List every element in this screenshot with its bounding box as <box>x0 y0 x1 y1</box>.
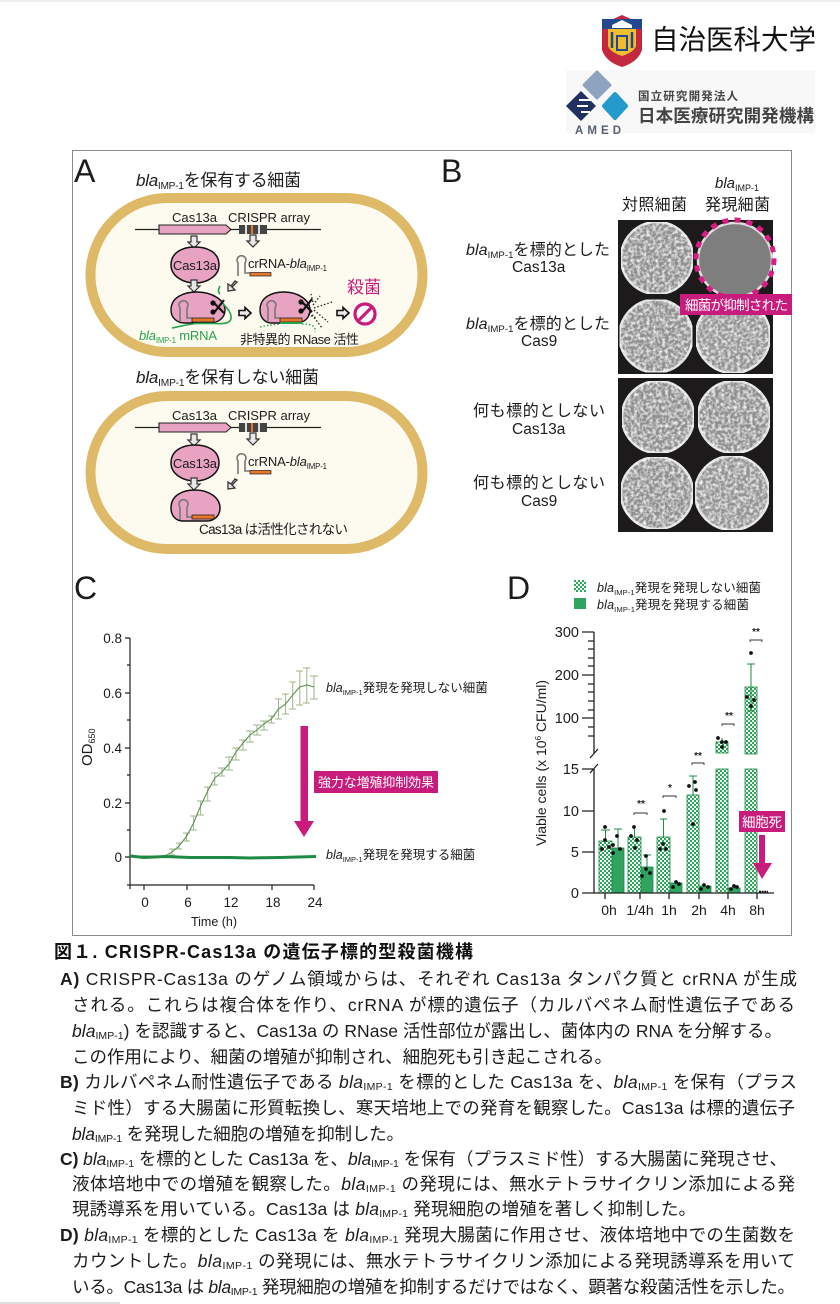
text block: C: bla <box>348 1149 371 1169</box>
legend: 発現を発現しない細菌 <box>635 581 761 595</box>
row label: Cas13a targeted: IMP-1 <box>488 250 513 261</box>
highlight ring <box>696 220 774 298</box>
heading: bacteria carrying blaIMP-1: IMP-1 <box>158 181 184 192</box>
axis title: Viable cells (x 10 <box>533 740 549 846</box>
panel letter A: A <box>74 153 96 189</box>
protein: Cas13a <box>171 445 219 481</box>
crRNA <box>237 454 327 474</box>
text block: B: B) カルバペネム耐性遺伝子である bla <box>60 1072 363 1092</box>
panel: C <box>74 570 488 929</box>
panel letter D: D <box>507 570 530 606</box>
heading: bacteria without blaIMP-1: を保有しない細菌 <box>184 368 319 387</box>
text block: B: を標的とした Cas13a を、 <box>393 1072 613 1092</box>
data points <box>600 651 768 892</box>
inactive complex <box>171 490 220 521</box>
arrow: crRNA transcription <box>247 235 259 247</box>
gene: CRISPR array <box>228 210 310 234</box>
protein: Cas13a <box>171 247 219 283</box>
series label: not expressing: bla <box>326 681 343 695</box>
plate photos: bottom <box>618 378 773 532</box>
significance marks: ** <box>752 627 760 638</box>
arrow: crRNA transcription <box>247 433 259 445</box>
significance marks: ** <box>694 751 702 762</box>
text block: B: bla <box>614 1072 638 1092</box>
caption title: 図１. CRISPR-Cas13a の遺伝子標的型殺菌機構 <box>54 942 473 962</box>
text block: C <box>60 1149 795 1220</box>
x tick labels: 0 <box>141 895 149 910</box>
significance marks <box>637 627 760 810</box>
text block: B: bla <box>72 1124 95 1144</box>
crRNA <box>237 256 327 276</box>
row label: no-target Cas9: 何も標的としない <box>473 474 605 492</box>
x tick labels: 12 <box>223 895 239 910</box>
gene: Cas13a <box>159 408 231 432</box>
arrow: complex formation <box>188 478 200 490</box>
label: not activated: Cas13a は活性化されない <box>199 522 348 537</box>
bar chart <box>533 625 774 918</box>
arrow: to killing <box>337 308 349 318</box>
x tick labels <box>601 902 765 918</box>
legend: bla <box>597 598 614 612</box>
y tick labels: 0 <box>571 886 579 902</box>
x tick labels <box>141 895 323 910</box>
text block: C: の発現には、無水テトラサイクリン添加による発 <box>396 1174 795 1194</box>
axis title: OD650: 650 <box>87 728 97 744</box>
text block: B: IMP-1 <box>95 1133 122 1145</box>
column label: expressing <box>705 175 770 214</box>
text block: D: いる。Cas13a は bla <box>72 1277 231 1297</box>
x tick labels: 8h <box>749 902 765 918</box>
row label: Cas13a targeted <box>466 241 610 276</box>
protein: Cas13a: Cas13a <box>173 456 218 471</box>
AMED wordmark: AMED <box>575 125 621 137</box>
arrow: cell death <box>753 835 772 879</box>
y tick labels: 0.4 <box>103 741 122 756</box>
row label: no-target Cas9: Cas9 <box>521 493 557 510</box>
text block: B: IMP-1 <box>363 1081 393 1093</box>
bacterium without target <box>90 396 422 549</box>
text block: A: この作用により、細菌の増殖が抑制され、細胞死も引き起こされる。 <box>72 1047 612 1067</box>
legend <box>574 580 761 614</box>
significance brackets <box>634 640 762 815</box>
y tick labels: 0.8 <box>103 631 122 646</box>
gene: CRISPR array: CRISPR array <box>228 210 310 225</box>
y tick labels: 100 <box>555 711 579 727</box>
text block: A: IMP-1 <box>95 1030 124 1042</box>
text block: C: 液体培地中での増殖を観察した。bla <box>72 1174 365 1194</box>
protein: Cas13a: Cas13a <box>173 258 218 273</box>
arrow: growth suppression <box>294 726 314 837</box>
plate photos: top <box>618 220 773 374</box>
column label: expressing: 発現細菌 <box>705 196 770 214</box>
row label: Cas9 targeted: IMP-1 <box>488 324 513 335</box>
icon: AMED diamonds <box>566 72 626 121</box>
text block: C: IMP-1 <box>366 1183 396 1195</box>
axis title: time: Time (h) <box>191 915 237 929</box>
crRNA: IMP-1 <box>307 462 327 471</box>
text block: B <box>60 1072 797 1145</box>
text block: C: IMP-1 <box>379 1208 408 1220</box>
text block: D: 発現細胞の増殖を抑制するだけではなく、顕著な殺菌活性を示した。 <box>257 1277 795 1297</box>
text block: D: を標的とした Cas13a を <box>138 1225 345 1245</box>
logo: Jichi Medical University <box>602 15 816 67</box>
text block: C: C) bla <box>60 1149 106 1169</box>
y tick labels <box>103 631 122 865</box>
callout: bacteria suppressed: 細菌が抑制された <box>685 298 788 313</box>
complex bound to mRNA <box>171 286 231 328</box>
text block: D: bla <box>345 1225 369 1245</box>
row label: no-target Cas13a <box>473 402 605 438</box>
bacterium with target <box>90 198 422 352</box>
y tick labels: 300 <box>555 625 579 641</box>
series label: expressing: IMP-1 <box>343 855 363 864</box>
axis title: CFU/ml) <box>533 680 549 736</box>
text block: D: IMP-1 <box>108 1234 138 1246</box>
text block: B: ミド性）する大腸菌に形質転換し、寒天培地上での発育を観察した。Cas13a は標的遺伝子 <box>72 1098 795 1118</box>
y tick labels: 15 <box>563 762 579 778</box>
callout: cell death: 細胞死 <box>742 815 782 830</box>
y tick labels: 200 <box>555 668 579 684</box>
gene: CRISPR array <box>228 408 310 432</box>
legend: IMP-1 <box>614 605 635 614</box>
row label: no-target Cas13a: Cas13a <box>512 421 566 438</box>
curve: expressing <box>130 856 316 858</box>
x tick labels: 1/4h <box>626 902 654 918</box>
text block: D: の発現には、無水テトラサイクリン添加による発現誘導系を用いて <box>253 1251 795 1271</box>
callout: growth suppression: 強力な増殖抑制効果 <box>318 775 434 790</box>
panel: B <box>441 153 792 532</box>
label: mRNA: bla <box>139 328 156 343</box>
top page strip <box>0 0 840 2</box>
text block: C: IMP-1 <box>371 1158 399 1170</box>
series label: expressing: 発現を発現する細菌 <box>363 848 475 862</box>
column label: expressing: bla <box>715 175 735 192</box>
row label: Cas13a targeted: Cas13a <box>512 259 566 276</box>
y tick labels: 5 <box>571 845 579 861</box>
AMED name small: 国立研究開発法人 <box>638 89 738 103</box>
label: mRNA: mRNA <box>176 328 217 343</box>
axes <box>582 632 774 899</box>
crRNA: IMP-1 <box>307 264 327 273</box>
axes <box>125 638 314 890</box>
callout: growth suppression <box>314 771 438 793</box>
bottom page strip <box>0 1302 120 1304</box>
series label: not expressing: IMP-1 <box>343 688 363 697</box>
gene: Cas13a: Cas13a <box>172 408 218 423</box>
row label: Cas9 targeted: Cas9 <box>521 333 557 350</box>
series label: not expressing: 発現を発現しない細菌 <box>363 681 488 695</box>
gene: Cas13a: Cas13a <box>172 210 218 225</box>
icon: university crest <box>602 15 642 67</box>
significance marks: * <box>668 783 672 794</box>
text block: B: IMP-1 <box>638 1081 667 1093</box>
figure frame <box>72 150 792 936</box>
text block: D: 発現大腸菌に作用させ、液体培地中での生菌数を <box>399 1225 795 1245</box>
university name: 自治医科大学 <box>651 24 816 55</box>
legend: bla <box>597 581 614 595</box>
arrow: crRNA joins <box>228 479 237 489</box>
crRNA: crRNA-bla <box>248 454 307 469</box>
gene: Cas13a <box>159 210 231 234</box>
text block: B: を発現した細胞の増殖を抑制した。 <box>122 1124 404 1144</box>
text block: D: IMP-1 <box>222 1260 252 1272</box>
panel: D <box>507 570 785 918</box>
text block: A: される。これらは複合体を作り、crRNA が標的遺伝子（カルバペネム耐性遺伝子である <box>72 995 795 1015</box>
AMED name large: 日本医療研究開発機構 <box>638 106 814 126</box>
text block: A <box>60 969 797 1067</box>
text block: D: IMP-1 <box>231 1286 258 1298</box>
text block: C: を標的とした Cas13a を、 <box>134 1149 348 1169</box>
line chart <box>79 631 323 929</box>
label: bactericidal: 殺菌 <box>347 278 381 297</box>
error bars <box>601 664 755 867</box>
curve: not expressing <box>130 685 314 856</box>
x tick labels: 0h <box>601 902 617 918</box>
text block: D: D) bla <box>60 1225 108 1245</box>
heading: bacteria carrying blaIMP-1: bla <box>136 171 158 190</box>
panel: A <box>74 153 422 549</box>
bars <box>599 687 757 893</box>
row label: no-target Cas13a: 何も標的としない <box>473 402 605 420</box>
arrow: activation <box>239 308 251 318</box>
axis title: 6 <box>534 735 543 740</box>
text block: D <box>60 1225 795 1298</box>
significance marks: ** <box>725 711 733 722</box>
arrow: complex formation <box>188 280 200 292</box>
icon: prohibition <box>355 304 375 324</box>
row label: Cas9 targeted: bla <box>466 316 488 333</box>
x tick labels: 6 <box>184 895 192 910</box>
significance marks: ** <box>637 799 645 810</box>
text block: A: A) CRISPR-Cas13a のゲノム領域からは、それぞれ Cas13a タンパク質と crRNA が生成 <box>60 969 797 989</box>
panel letter C: C <box>74 570 97 606</box>
text block: D: カウントした。bla <box>72 1251 222 1271</box>
label: nonspecific RNase: 非特異的 RNase 活性 <box>240 332 359 347</box>
x tick labels: 24 <box>307 895 323 910</box>
text block: C: 現誘導系を用いている。Cas13a は bla <box>72 1199 379 1219</box>
y tick labels: 10 <box>563 804 579 820</box>
legend: IMP-1 <box>614 588 635 597</box>
x tick labels: 1h <box>661 902 677 918</box>
text block: D: IMP-1 <box>369 1234 399 1246</box>
text block: A: bla <box>72 1021 96 1041</box>
axis title: OD650: OD <box>79 744 96 766</box>
panel letter B: B <box>441 153 462 189</box>
text block: C: を保有（プラスミド性）する大腸菌に発現させ、 <box>399 1149 787 1169</box>
x tick labels: 18 <box>265 895 281 910</box>
arrow: Cas13a transcription <box>188 236 200 248</box>
text block: A: ) を認識すると、Cas13a の RNase 活性部位が露出し、菌体内の RNA を分解する。 <box>124 1021 782 1041</box>
heading: bacteria without blaIMP-1: bla <box>136 368 158 387</box>
x tick labels: 4h <box>720 902 736 918</box>
label: mRNA: IMP-1 <box>156 336 176 345</box>
row label: Cas13a targeted: bla <box>466 242 488 259</box>
heading: bacteria carrying blaIMP-1: を保有する細菌 <box>184 171 301 190</box>
row label: Cas9 targeted: を標的とした <box>514 315 610 333</box>
callout: bacteria suppressed <box>680 294 792 315</box>
callout: cell death <box>739 811 785 832</box>
legend: 発現を発現する細菌 <box>635 598 749 612</box>
error bars <box>169 668 318 855</box>
row label: Cas13a targeted: を標的とした <box>514 241 610 259</box>
x tick labels: 2h <box>691 902 707 918</box>
y tick labels: 0.2 <box>103 796 122 811</box>
text block: C: 発現細胞の増殖を著しく抑制した。 <box>408 1199 696 1219</box>
row label: Cas9 targeted <box>466 315 610 350</box>
y tick labels: 0 <box>114 850 122 865</box>
column label: control: 対照細菌 <box>622 196 687 214</box>
gene: CRISPR array: CRISPR array <box>228 408 310 423</box>
text block: C: IMP-1 <box>106 1158 134 1170</box>
arrow: Cas13a transcription <box>188 434 200 446</box>
column label: expressing: IMP-1 <box>735 183 759 193</box>
series label: expressing: bla <box>326 848 343 862</box>
row label: no-target Cas9 <box>473 474 605 510</box>
arrow: crRNA joins <box>228 281 237 291</box>
logo: AMED <box>566 70 815 137</box>
y tick labels: 0.6 <box>103 686 122 701</box>
activated complex <box>260 292 332 332</box>
text block: B: を保有（プラス <box>668 1072 797 1092</box>
heading: bacteria without blaIMP-1: IMP-1 <box>158 378 185 389</box>
y tick labels <box>555 625 579 902</box>
crRNA: crRNA-bla <box>248 256 307 271</box>
